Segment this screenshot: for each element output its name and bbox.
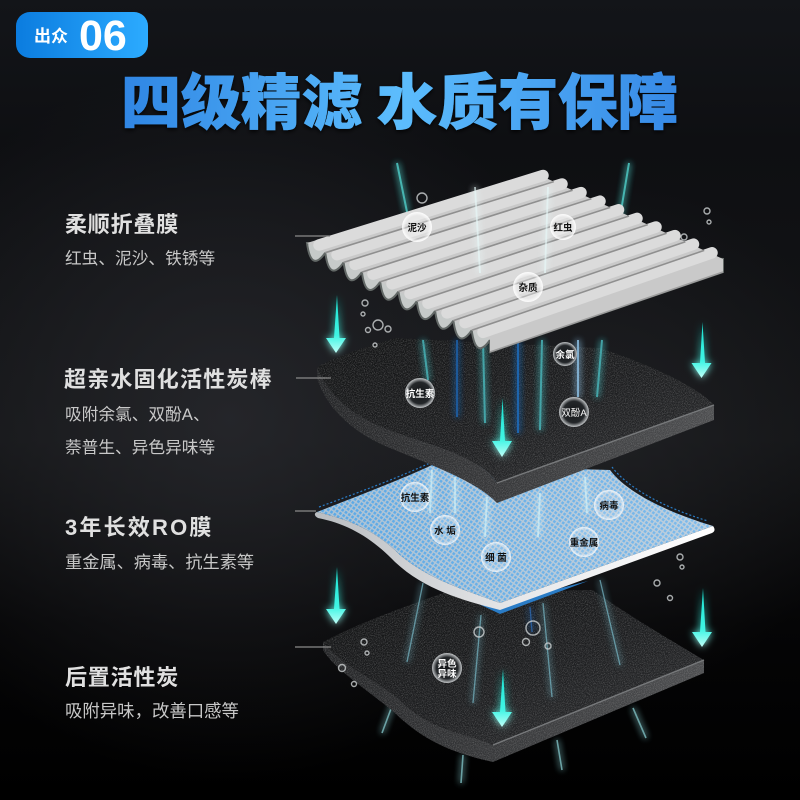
- bubble: 病毒: 病毒: [599, 500, 619, 512]
- bubble: 双酚A: 双酚A: [561, 408, 587, 419]
- badge: 出众06: 06: [79, 12, 127, 60]
- text block: 超亲水固化活性炭棒: 超亲水固化活性炭棒: [64, 367, 273, 392]
- layer: RO membrane: [315, 462, 715, 614]
- bubble: 细菌: [481, 542, 511, 572]
- badge: 出众06: [16, 12, 148, 60]
- text block: 柔顺折叠膜: 柔顺折叠膜: [65, 212, 179, 237]
- beams on the bottom layer: [407, 580, 620, 703]
- beams on the carbon rod: [423, 340, 602, 433]
- text block: 3年长效RO膜: 重金属、病毒、抗生素等: [65, 552, 254, 572]
- layer: folded membrane: [307, 173, 723, 352]
- bubble: 余氯: [553, 342, 577, 366]
- text block: 后置活性炭: 吸附异味，改善口感等: [65, 701, 239, 721]
- bubble: 异色异味: 异味: [437, 668, 457, 680]
- bubble: 余氯: 余氯: [555, 349, 575, 361]
- bubble: 病毒: [594, 490, 624, 520]
- bubble: 抗生素 light: 抗生素: [401, 492, 430, 504]
- bubble: 红虫: 红虫: [553, 222, 573, 234]
- text block: 3年长效RO膜: 3年长效RO膜: [65, 515, 214, 540]
- beams through the folded membrane: [475, 187, 548, 273]
- bubble: 抗生素 dark: [405, 378, 435, 408]
- badge: 出众06: 出众: [34, 27, 68, 46]
- bubble: 异色异味: [432, 653, 462, 683]
- text block: 后置活性炭: 后置活性炭: [65, 665, 179, 690]
- bubble: 泥沙: [402, 212, 432, 242]
- text block: 超亲水固化活性炭棒: [64, 367, 273, 457]
- leader lines: [295, 236, 331, 647]
- bubble: 杂质: 杂质: [518, 282, 538, 294]
- bubble: 抗生素 dark: 抗生素: [406, 388, 435, 400]
- layer: hydrophilic carbon rod: [317, 338, 714, 503]
- bubble: 双酚A: [559, 397, 589, 427]
- arrows: water flow: [326, 295, 712, 727]
- text block: 超亲水固化活性炭棒: 萘普生、异色异味等: [65, 438, 215, 457]
- layer: post activated carbon: [323, 590, 704, 762]
- text block: 柔顺折叠膜: 红虫、泥沙、铁锈等: [65, 249, 215, 268]
- bubble: 红虫: [550, 214, 576, 240]
- text block: 3年长效RO膜: [65, 515, 254, 572]
- bubble: 水垢: [430, 515, 460, 545]
- small bubbles: [338, 193, 711, 686]
- beams below the bottom layer: [382, 698, 646, 783]
- text block: 超亲水固化活性炭棒: 吸附余氯、双酚A、: [65, 405, 210, 424]
- bubble: 泥沙: 泥沙: [407, 222, 427, 234]
- title: 四级精滤水质有保障: [121, 70, 678, 137]
- text block: 后置活性炭: [65, 665, 239, 721]
- bubble: 抗生素 light: [400, 482, 430, 512]
- beams on RO membrane: [430, 470, 587, 537]
- bubble: 重金属: [569, 527, 599, 557]
- bubble: 重金属: 重金属: [570, 537, 598, 549]
- bubble: 细菌: 细 菌: [485, 552, 507, 564]
- beams above the folded membrane: [397, 163, 629, 247]
- bubble: 水垢: 水 垢: [434, 525, 456, 537]
- bubble: 杂质: [513, 272, 543, 302]
- text block: 柔顺折叠膜: [65, 212, 215, 268]
- bubble: 异色异味: 异色: [437, 658, 457, 670]
